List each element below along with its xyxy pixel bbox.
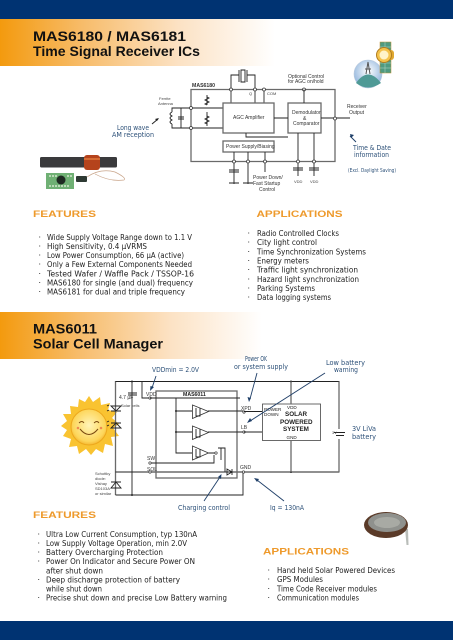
circuit diagram: MAS6011 solar cell manager: SOL xyxy=(147,467,157,473)
circuit diagram: MAS6011 solar cell manager: 4.7 µF xyxy=(119,395,133,401)
annotation: VDDmin: VDDmin = 2.0V xyxy=(152,365,199,374)
list: MAS6180 applications: Traffic light synchronization xyxy=(256,266,358,274)
list: MAS6011 features: Precise shut down and precise Low Battery warning xyxy=(46,594,227,602)
annotation: quiescent current: Iq = 130nA xyxy=(270,503,304,512)
circuit diagram: MAS6011 solar cell manager: LB xyxy=(241,425,248,431)
annotation: power OK: or system supply xyxy=(234,362,289,371)
block diagram: MAS6180 receiver xyxy=(158,70,367,193)
list: MAS6011 features xyxy=(38,530,227,602)
list: MAS6180 applications: · xyxy=(248,229,250,238)
block diagram: MAS6180 receiver: Ferrite xyxy=(159,96,171,101)
list: MAS6011 applications: Time Code Receiver modules xyxy=(276,584,377,594)
bottom navy band xyxy=(0,621,453,640)
circuit diagram: MAS6011 solar cell manager: diode: xyxy=(95,476,106,481)
photo: coin cell battery xyxy=(364,512,408,545)
heading: features: FEATURES xyxy=(33,510,96,521)
list: MAS6011 features: Deep discharge protection of battery xyxy=(46,576,180,584)
list: MAS6180 applications: · xyxy=(248,256,250,266)
circuit diagram: MAS6011 solar cell manager: Solar cells xyxy=(121,403,139,408)
list: MAS6011 applications: · xyxy=(268,594,270,602)
block diagram: MAS6180 receiver: Antenna xyxy=(158,101,174,106)
block diagram: MAS6180 receiver: Fast Startup xyxy=(253,181,280,187)
list: MAS6180 applications: City light control xyxy=(257,238,317,247)
power supply block xyxy=(223,141,275,152)
list: MAS6180 applications: · xyxy=(248,275,250,284)
list: MAS6180 applications: · xyxy=(248,248,250,256)
section banner: MAS6180 / MAS6181 xyxy=(0,19,275,66)
circuit diagram: MAS6011 solar cell manager: Schottky xyxy=(95,471,110,476)
block diagram: MAS6180 receiver: Power Down/ xyxy=(253,175,283,181)
power supply block: Power Supply/Biasing xyxy=(226,144,275,150)
circuit diagram: MAS6011 solar cell manager: GND xyxy=(240,465,252,471)
list: MAS6180 features: · xyxy=(38,270,41,278)
list: MAS6011 applications: · xyxy=(268,566,270,575)
list: MAS6011 features: · xyxy=(38,576,40,584)
solar powered system block: SYSTEM xyxy=(283,426,309,433)
heading: applications: APPLICATIONS xyxy=(263,546,349,558)
list: MAS6180 features: Only a Few External Components Needed xyxy=(47,260,192,269)
section banner: MAS6011: MAS6011 xyxy=(33,320,97,336)
list: MAS6180 features: Tested Wafer / Waffle Pack / TSSOP-16 xyxy=(46,270,194,278)
list: MAS6011 features: Low Supply Voltage Operation, min 2.0V xyxy=(46,539,188,548)
block diagram: MAS6180 receiver: VDD xyxy=(294,179,303,184)
demodulator block: Comparator xyxy=(293,121,320,127)
block diagram: MAS6180 receiver: Output xyxy=(349,110,365,116)
list: MAS6011 applications xyxy=(268,566,395,602)
note: long wave AM reception xyxy=(112,118,159,139)
list: MAS6180 applications: · xyxy=(248,238,250,247)
list: MAS6011 features: Power On Indicator and Secure Power ON xyxy=(46,557,195,566)
list: MAS6180 applications: Data logging systems xyxy=(257,293,331,302)
heading: features: FEATURES xyxy=(33,209,96,220)
note: time and date information xyxy=(348,134,396,174)
list: MAS6180 applications: Radio Controlled Clocks xyxy=(257,229,339,238)
list: MAS6011 features: · xyxy=(38,594,40,602)
list: MAS6180 applications: Energy meters xyxy=(257,256,309,266)
section banner: MAS6011: Solar Cell Manager xyxy=(33,336,164,352)
annotation: low battery warning: Low battery xyxy=(326,358,366,367)
annotation: 3V LiVa battery xyxy=(352,424,377,441)
demodulator block: Demodulator xyxy=(292,110,321,116)
list: MAS6180 applications xyxy=(248,229,366,302)
circuit diagram: MAS6011 solar cell manager xyxy=(95,380,345,496)
solar powered system block xyxy=(262,404,320,440)
list: MAS6180 features: MAS6180 for single (and dual) frequency xyxy=(47,278,193,288)
AGC amplifier block: AGC Amplifier xyxy=(233,115,265,121)
block diagram: MAS6180 receiver: MAS6180 xyxy=(192,83,215,89)
circuit diagram: MAS6011 solar cell manager: or similar xyxy=(95,491,112,496)
note: long wave AM reception: AM reception xyxy=(112,130,154,139)
list: MAS6011 applications: Communication modules xyxy=(277,594,359,602)
annotation: charging control xyxy=(178,474,230,512)
list: MAS6180 applications: Parking Systems xyxy=(257,284,315,293)
annotation: low battery warning xyxy=(247,358,366,423)
list: MAS6011 features: · xyxy=(38,530,40,539)
photo: ferrite antenna and receiver module xyxy=(40,155,125,189)
list: MAS6180 features: · xyxy=(38,242,41,251)
list: MAS6180 applications: · xyxy=(248,284,250,293)
list: MAS6011 applications: · xyxy=(268,575,270,584)
list: MAS6180 applications: · xyxy=(248,293,250,302)
list: MAS6180 features: · xyxy=(38,278,41,288)
list: MAS6011 applications: GPS Modules xyxy=(277,575,323,584)
annotation: 3V LiVa battery: 3V LiVa xyxy=(352,424,376,433)
block diagram: MAS6180 receiver: VDD xyxy=(310,179,319,184)
list: MAS6180 features: High Sensitivity, 0.4 µVRMS xyxy=(47,242,147,251)
demodulator block xyxy=(288,103,321,133)
annotation: power OK xyxy=(234,354,289,402)
MAS6011 IC xyxy=(156,391,237,478)
note: time and date information: Time & Date xyxy=(352,143,391,152)
note: time and date information: (Excl. Daylight Saving) xyxy=(348,168,396,174)
list: MAS6180 features: Wide Supply Voltage Range down to 1.1 V xyxy=(47,233,193,242)
demodulator block: & xyxy=(303,116,307,122)
block diagram: MAS6180 receiver: COM xyxy=(267,91,276,96)
list: MAS6180 applications: Hazard light synchronization xyxy=(257,275,359,284)
list: MAS6180 features: · xyxy=(38,251,41,260)
icon: smiling sun xyxy=(61,396,119,455)
annotation: power OK: Power OK xyxy=(245,354,267,363)
note: time and date information: information xyxy=(354,150,389,159)
list: MAS6180 features: · xyxy=(38,288,41,296)
section banner: MAS6180 / MAS6181: MAS6180 / MAS6181 xyxy=(33,28,186,44)
block diagram: MAS6180 receiver: Receiver xyxy=(347,104,367,110)
list: MAS6011 features: Battery Overcharging Protection xyxy=(46,548,163,557)
block diagram: MAS6180 receiver: Optional Control xyxy=(288,74,324,80)
solar powered system block: DOWN xyxy=(264,412,279,417)
list: MAS6180 features: Low Power Consumption, 66 µA (active) xyxy=(47,251,184,260)
AGC amplifier block xyxy=(223,103,274,133)
list: MAS6180 features xyxy=(38,233,194,296)
circuit diagram: MAS6011 solar cell manager: Vishay xyxy=(95,481,107,486)
circuit diagram: MAS6011 solar cell manager: SD103A xyxy=(95,486,110,491)
list: MAS6011 features: while shut down xyxy=(46,584,102,594)
list: MAS6011 features: · xyxy=(38,539,40,548)
annotation: charging control: Charging control xyxy=(178,503,230,512)
list: MAS6011 features: · xyxy=(38,557,40,566)
annotation: low battery warning: warning xyxy=(334,365,358,374)
icon: satellite, watch and radio tower xyxy=(354,42,394,88)
list: MAS6011 features: Ultra Low Current Consumption, typ 130nA xyxy=(46,530,198,539)
solar powered system block: SOLAR xyxy=(285,411,307,418)
block diagram: MAS6180 receiver: Control xyxy=(259,187,275,193)
list: MAS6180 applications: · xyxy=(248,266,250,274)
list: MAS6180 features: · xyxy=(38,233,41,242)
heading: applications: APPLICATIONS xyxy=(256,209,342,220)
list: MAS6180 applications: Time Synchronization Systems xyxy=(256,248,366,256)
list: MAS6011 applications: · xyxy=(268,584,270,594)
list: MAS6180 features: · xyxy=(38,260,41,269)
note: long wave AM reception: Long wave xyxy=(117,123,149,132)
list: MAS6011 features: · xyxy=(38,548,40,557)
solar powered system block: VDD xyxy=(287,405,297,410)
annotation: 3V LiVa battery: battery xyxy=(352,432,377,441)
solar powered system block: POWERED xyxy=(280,419,313,426)
solar powered system block: POWER xyxy=(264,407,282,412)
circuit diagram: MAS6011 solar cell manager: XPD xyxy=(241,406,252,412)
top navy band xyxy=(0,0,453,19)
solar powered system block: GND xyxy=(286,435,297,440)
section banner: MAS6180 / MAS6181: Time Signal Receiver ICs xyxy=(33,43,200,59)
circuit diagram: MAS6011 solar cell manager: SW xyxy=(147,456,155,462)
annotation: quiescent current xyxy=(254,478,304,512)
MAS6011 IC: MAS6011 xyxy=(183,392,206,398)
list: MAS6180 features: MAS6181 for dual and triple frequency xyxy=(47,288,185,296)
list: MAS6011 applications: Hand held Solar Powered Devices xyxy=(277,566,395,575)
annotation: VDDmin xyxy=(150,365,199,391)
section banner: MAS6011 xyxy=(0,312,262,359)
circuit diagram: MAS6011 solar cell manager: VDD xyxy=(146,392,157,398)
circuit diagram: MAS6011 solar cell manager: 3V xyxy=(332,430,337,435)
list: MAS6011 features: after shut down xyxy=(46,566,103,576)
block diagram: MAS6180 receiver: Q xyxy=(249,91,252,96)
block diagram: MAS6180 receiver: for AGC on/hold xyxy=(288,79,324,85)
